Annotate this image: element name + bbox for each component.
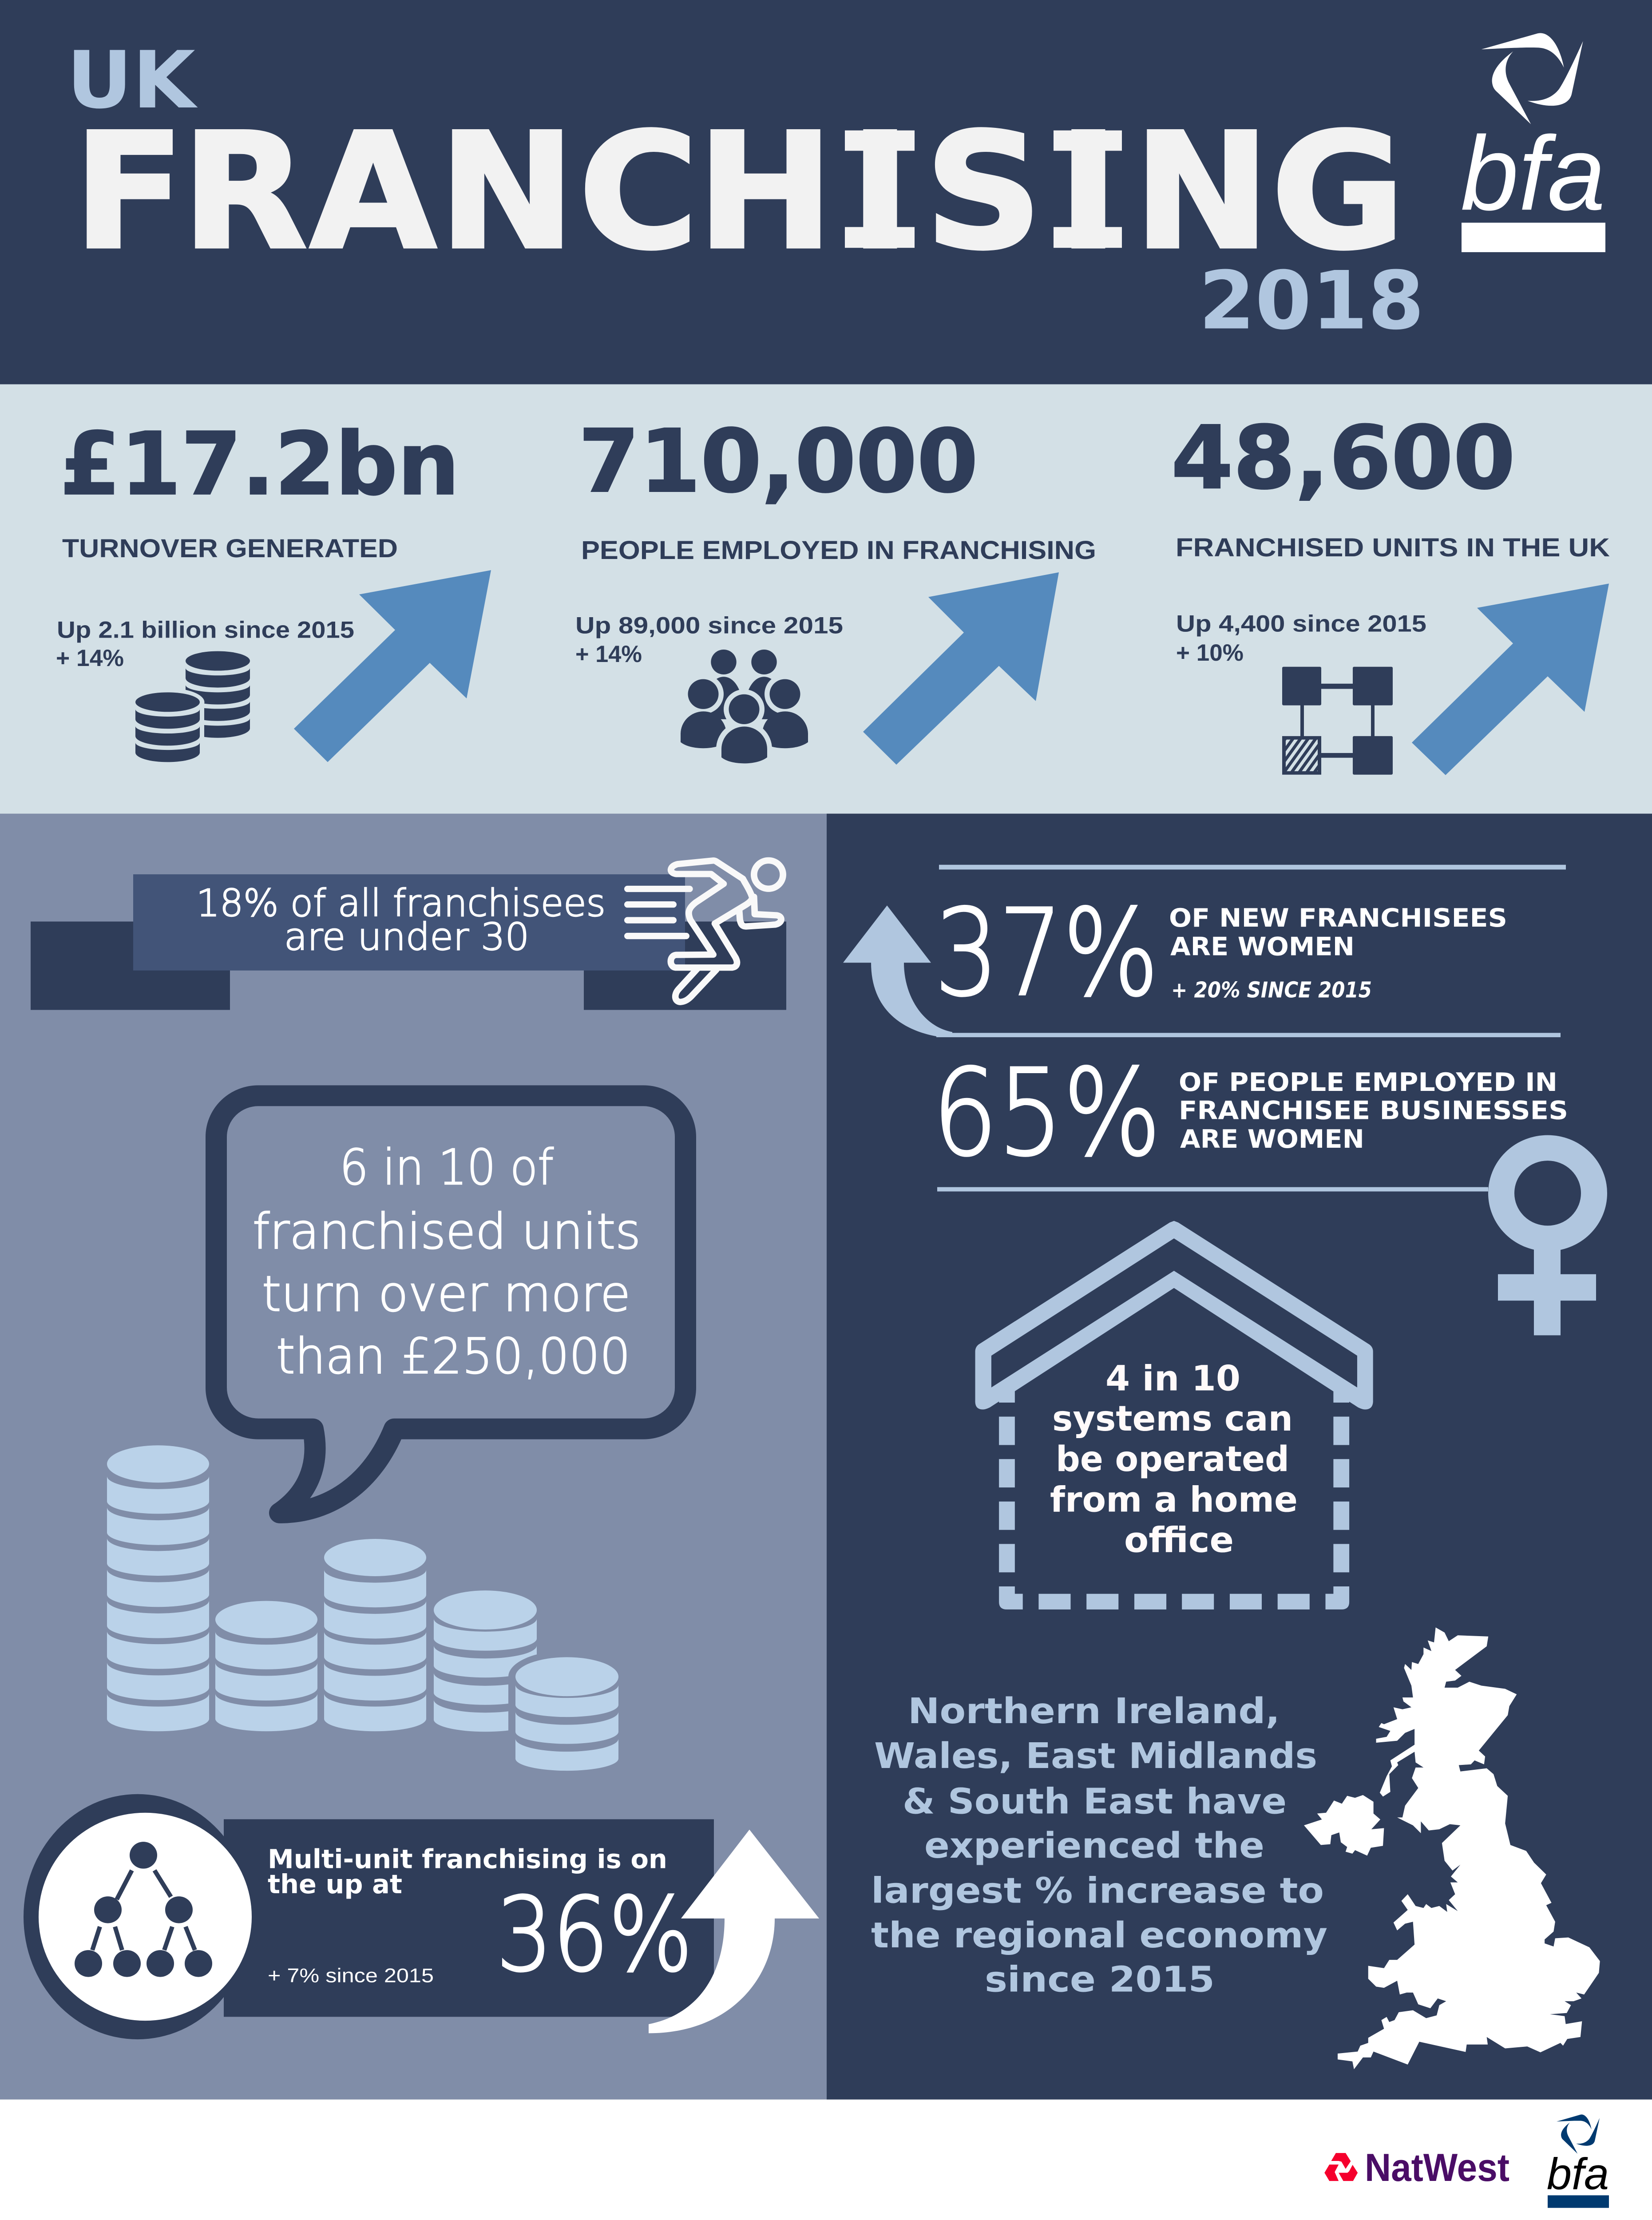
banner: under 30: 18% of all franchisees <box>196 882 606 925</box>
logo: bfa white <box>1461 33 1605 252</box>
banner: under 30: are under 30 <box>284 916 529 959</box>
icon: white up arrow <box>649 1830 819 2033</box>
title: FRANCHISING: FRANCHISING <box>73 99 1405 285</box>
stat: employment: Up 89,000 since 2015 <box>575 613 843 638</box>
stat: employment: PEOPLE EMPLOYED IN FRANCHISING <box>581 535 1096 565</box>
icon: house outline <box>975 1221 1373 1610</box>
stat: 37% new franchisees: 37% <box>935 884 1159 1023</box>
panel: right column <box>827 814 1652 2100</box>
icon: network squares <box>1282 667 1393 775</box>
text: home office: office <box>1124 1520 1234 1560</box>
text: home office: be operated <box>1056 1439 1289 1479</box>
icon: coin stacks <box>107 1445 626 1771</box>
speech text <box>253 1139 641 1385</box>
stat: franchised units: + 10% <box>1176 640 1244 666</box>
panel: header <box>0 0 1652 385</box>
text: regional economy: experienced the <box>924 1825 1264 1866</box>
icon: arrow up 3 <box>1412 583 1609 775</box>
logo: bfa colour: bfa <box>1547 2149 1609 2199</box>
stat: 37% new franchisees: OF NEW FRANCHISEES <box>1169 904 1507 933</box>
text: home office <box>1050 1358 1298 1560</box>
divider lines <box>936 865 1566 1191</box>
speech text: than £250,000 <box>276 1328 630 1385</box>
speech text: turn over more <box>262 1266 630 1322</box>
logo: bfa white: bfa <box>1461 115 1605 232</box>
icon: arrow up 2 <box>863 572 1059 765</box>
icon: people group <box>681 650 808 767</box>
callout: multi-unit franchising: Multi-unit franchising is on <box>268 1844 667 1874</box>
stat: franchised units: 48,600 <box>1171 408 1515 508</box>
map: United Kingdom <box>1304 1627 1600 2069</box>
speech bubble <box>216 1096 685 1513</box>
stat: employment <box>575 411 1096 667</box>
panel: footer <box>0 2100 1652 2220</box>
stat: turnover <box>56 415 460 671</box>
stat: turnover: £17.2bn <box>60 415 460 515</box>
speech text: 6 in 10 of <box>340 1139 554 1196</box>
text: regional economy: Wales, East Midlands <box>874 1736 1317 1776</box>
stat: 65% employed: OF PEOPLE EMPLOYED IN <box>1179 1068 1557 1097</box>
callout: multi-unit franchising: + 7% since 2015 <box>268 1964 434 1986</box>
callout: multi-unit franchising: the up at <box>268 1869 402 1899</box>
icon: curved up arrow <box>843 905 952 1036</box>
icon: female symbol <box>1498 1148 1596 1335</box>
stat: 65% employed: ARE WOMEN <box>1180 1125 1364 1154</box>
text: regional economy: largest % increase to <box>871 1871 1324 1911</box>
stat: turnover: TURNOVER GENERATED <box>62 534 398 563</box>
stat: 37% new franchisees: + 20% SINCE 2015 <box>1171 977 1372 1003</box>
icon: coins <box>129 651 250 762</box>
text: regional economy: & South East have <box>903 1781 1287 1822</box>
text: regional economy: the regional economy <box>871 1915 1327 1956</box>
stat: franchised units: Up 4,400 since 2015 <box>1176 611 1426 637</box>
stat: turnover: + 14% <box>56 645 124 671</box>
icon: arrow up 1 <box>294 570 491 762</box>
speech text: franchised units <box>253 1204 641 1260</box>
text: regional economy: since 2015 <box>985 1959 1215 2000</box>
stat: 37% new franchisees <box>935 884 1507 1023</box>
text: regional economy <box>871 1691 1327 2000</box>
stat: 65% employed: FRANCHISEE BUSINESSES <box>1179 1096 1568 1125</box>
icon: runner <box>627 860 783 1002</box>
stat: franchised units: FRANCHISED UNITS IN THE UK <box>1176 533 1610 562</box>
stat: turnover: Up 2.1 billion since 2015 <box>57 617 354 643</box>
text: home office: from a home <box>1050 1479 1298 1520</box>
banner: under 30 <box>31 874 786 1010</box>
panel: key statistics band <box>0 385 1652 814</box>
text: regional economy: Northern Ireland, <box>908 1691 1280 1732</box>
stat: employment: + 14% <box>575 642 642 667</box>
stat: employment: 710,000 <box>578 411 978 512</box>
stat: franchised units <box>1171 408 1610 666</box>
callout: multi-unit franchising: 36% <box>496 1875 693 1994</box>
heading: UK: UK <box>67 35 198 126</box>
icon: tree hierarchy <box>75 1842 212 1977</box>
stat: 37% new franchisees: ARE WOMEN <box>1170 932 1355 961</box>
callout: multi-unit franchising <box>24 1794 819 2039</box>
panel: left column <box>0 814 827 2100</box>
text: home office: 4 in 10 <box>1105 1358 1240 1399</box>
stat: 65% employed: 65% <box>932 1044 1161 1183</box>
heading: 2018: 2018 <box>1199 254 1424 348</box>
text: home office: systems can <box>1052 1399 1293 1439</box>
logo: NatWest: NatWest <box>1365 2146 1509 2189</box>
stat: 65% employed <box>932 1044 1568 1183</box>
logo: bfa colour <box>1547 2114 1609 2208</box>
